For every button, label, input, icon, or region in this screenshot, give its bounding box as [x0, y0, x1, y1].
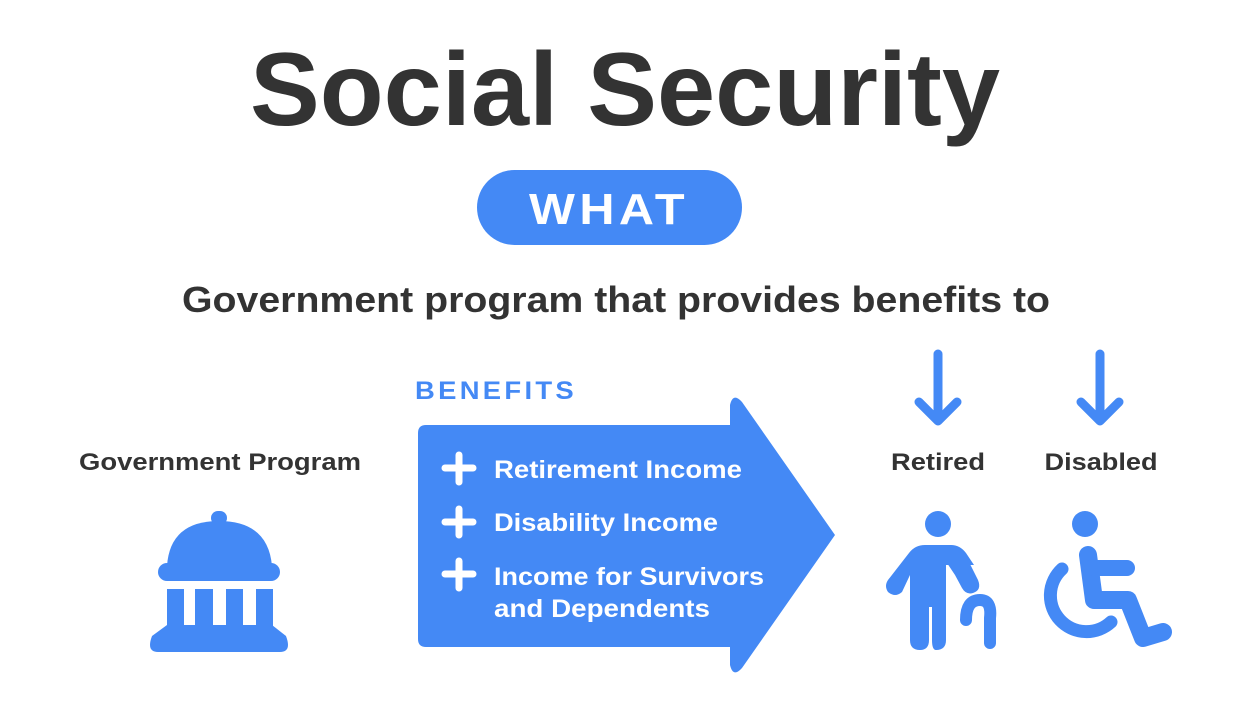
badge: WHAT: WHAT: [529, 185, 689, 234]
benefit item: Income for Survivors and Dependents: Income for Survivors: [494, 563, 764, 591]
benefit item: Retirement Income: Retirement Income: [494, 456, 742, 484]
arrow: down to Disabled: [1081, 354, 1119, 421]
arrow: down to Retired: [919, 354, 957, 421]
icon: wheelchair user: [1050, 511, 1163, 638]
label: Disabled: Disabled: [1044, 449, 1158, 476]
benefit item: Income for Survivors and Dependents: and Dependents: [494, 595, 710, 623]
benefit item: Income for Survivors and Dependents: [445, 561, 764, 623]
badge: WHAT: [477, 170, 742, 245]
icon: government building: [150, 511, 288, 652]
subtitle: Government program that provides benefits to: [182, 279, 1050, 320]
heading: BENEFITS: BENEFITS: [415, 377, 577, 405]
benefits arrow panel: [418, 398, 835, 672]
title: Social Security: [250, 32, 1000, 148]
benefit item: Disability Income: Disability Income: [494, 509, 718, 537]
icon: retired person with cane: [886, 511, 990, 650]
label: Retired: Retired: [891, 449, 985, 476]
label: Government Program: Government Program: [79, 449, 361, 476]
